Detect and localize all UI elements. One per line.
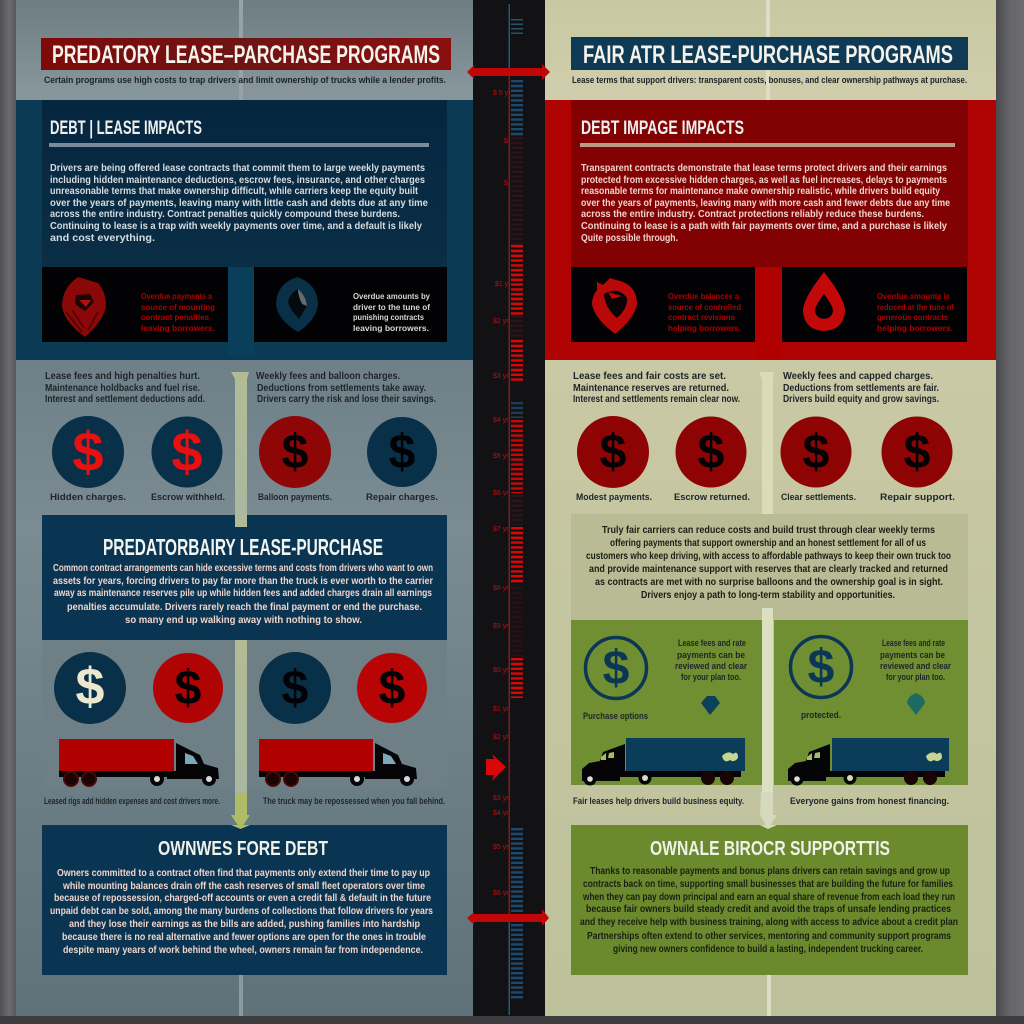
truck captions: fair [573,796,949,806]
timeline labels: $2 yr [493,318,509,325]
heading: debt impacts, fair: DEBT IMPAGE IMPACTS [581,118,744,139]
icon row: dollar coins, predatory [50,416,438,502]
card text: debt burden: source of mounting [141,302,215,312]
fair coin labels: Escrow returned. [674,492,750,502]
text columns: predatory costs: Interest and settlement deductions add. [45,394,205,405]
timeline labels: $4 yr [493,417,509,424]
body text: debt impacts, fair: protected from excessive hidden charges, as well as fuel increases, delays to payments [581,174,947,186]
text columns: fair costs: Drivers build equity and grow savings. [783,394,939,405]
card: debt burden [42,267,228,342]
card: reduced burden [571,267,755,342]
body text: owners for debt [50,867,433,956]
panel: predatory programs (left column) [16,0,473,1016]
subtitle: predatory: Certain programs use high costs to trap drivers and limit ownership of trucks while a lender profits. [44,75,446,85]
green card text right: reviewed and clear [880,661,951,671]
icon: coin 1 [52,416,124,488]
body text: debt impacts, fair: reasonable terms for maintenance make ownership realistic, while drivers build equity [581,185,940,197]
fair coin labels [576,492,955,502]
text columns: predatory costs: Deductions from settlements take away. [257,383,426,394]
timeline labels: $5 yr [493,844,509,851]
panel: fair explanation [571,514,968,620]
coin labels: Balloon payments. [258,492,332,502]
timeline labels: $ [504,180,508,187]
connector bar: upper left [231,372,249,527]
timeline tick bands [511,19,523,1000]
card text: debt burden: leaving borrowers. [141,323,215,333]
text columns: predatory costs: Drivers carry the risk and lose their savings. [257,394,436,405]
timeline labels: $9 yr [493,623,509,630]
green card text left [675,638,747,682]
icon: fair coin 4: $ [904,426,931,479]
icon: fair coin 3: $ [803,426,830,479]
icon: red truck 2 [259,739,417,786]
icon row: dollar coins, fair [576,416,955,502]
icon: coin 4: $ [389,426,416,479]
icon: fair coin 4 [882,416,952,488]
caption: left gem: Purchase options [583,711,648,721]
fair coin labels: Repair support. [880,492,955,502]
central timeline strip [467,0,550,1016]
green panels: fair support [571,608,968,829]
body text: owners for debt: because there is no real alternative and fewer options are open for the ones in trouble [62,931,426,943]
icon: outlined coin right: $ [808,641,835,694]
green card text right: payments can be [880,650,945,660]
body text: debt impacts, fair: Quite possible through. [581,232,678,244]
icon: round gem [907,693,925,715]
body text: debt lease impacts: across the entire industry. Contract penalties quickly compound these burdens. [50,208,400,220]
card text: drop of relief: Overdue amounts is [877,291,950,301]
icon: outlined coin left [586,638,646,698]
icon: coin 6: $ [175,662,202,715]
icon: coin 2 [152,416,222,488]
body text: predatory lease-purchase: penalties accumulate. Drivers rarely reach the final payment or end the purchase. [67,601,422,613]
timeline labels: $3 yr [493,373,509,380]
body text: debt lease impacts: unreasonable terms that make ownership difficult, while carriers keep the equity built [50,185,418,197]
timeline labels: $1 yr [495,281,511,288]
card text: drop of relief: generous contracts [877,312,948,322]
icon: coin 3: $ [282,426,309,479]
arrow: bottom double-headed [467,909,549,926]
truck captions: predatory: Leased rigs add hidden expenses and cost drivers more. [44,796,220,806]
timeline labels: $6 yr [493,890,509,897]
timeline labels: $7 yr [493,526,509,533]
section: debt and lease impacts [16,100,473,360]
arrow: top double-headed [467,64,550,80]
card text: drop of relief: reduced at the tune of [877,302,954,312]
icon: fair coin 2: $ [698,426,725,479]
subtitle: fair: Lease terms that support drivers: transparent costs, bonuses, and clear ownership pathways at purchase. [572,75,967,85]
panel: predatory lease-purchase [42,515,447,640]
icon: coin 6 [153,653,223,723]
text columns: predatory costs: Maintenance holdbacks and fuel rise. [45,383,200,394]
truck captions: predatory: The truck may be repossessed when you fall behind. [263,796,445,806]
icon: red shield pin [62,277,106,337]
body text: debt lease impacts: over the years of payments, leaving many with little cash and debts due at any time [50,197,428,209]
text columns: fair costs: Interest and settlements remain clear now. [573,394,740,405]
timeline labels [493,90,511,897]
icon: red drop [803,272,845,331]
text columns: predatory costs: Lease fees and high penalties hurt. [45,371,200,382]
heading: owners for debt: OWNWES FORE DEBT [158,838,328,860]
timeline labels: $5 yr [493,453,509,460]
card text: lost equity [353,291,430,333]
icon: coin 2: $ [171,420,203,483]
green card text left: for your plan too. [681,672,741,682]
body text: owners for debt: and they lose their earnings as the bills are added, pushing families into hardship [69,918,420,930]
body text: fair explanation: Truly fair carriers can reduce costs and build trust through clear weekly terms [602,524,935,536]
text columns: fair costs [573,371,939,405]
card text: reduced burden [668,291,741,333]
card text: reduced burden: Overdue balances a [668,291,739,301]
card text: drop of relief [877,291,954,333]
card text: lost equity: Overdue amounts by [353,291,430,301]
card: drop of relief [782,267,967,342]
body text: debt lease impacts [50,162,428,244]
timeline labels: $3 yr [493,795,509,802]
text columns: fair costs: Maintenance reserves are returned. [573,383,729,394]
card text: debt burden: contract penalties [141,312,209,322]
title banner: predatory: PREDATORY LEASE–PARCHASE PROGRAMS [52,41,440,69]
caption: right gem: protected. [801,710,841,720]
arrow: middle marker [486,754,506,781]
body text: owners for debt: Owners committed to a contract often find that payments only extend their time to pay up [57,867,430,879]
body text: owner support: giving new owners confidence to build a lasting, independent trucking career. [613,943,923,955]
coin labels: Escrow withheld. [151,492,225,502]
timeline labels: $8 yr [493,585,509,592]
icon: coin 7: $ [282,662,309,715]
card text: reduced burden: contract revisions [668,312,735,322]
text columns: fair costs: Lease fees and fair costs are set. [573,371,726,382]
body text: predatory lease-purchase: Common contract arrangements can hide excessive terms and costs from drivers who want to own [53,562,433,574]
timeline labels: $ [504,138,508,145]
section: debt impacts, fair [545,100,996,360]
body text: predatory lease-purchase [53,562,433,626]
body text: fair explanation: as contracts are met with no surprise balloons and the ownership goal is in sight. [595,576,943,588]
body text: debt impacts, fair: across the entire industry. Contract protections reliably reduce these burdens. [581,208,924,220]
card text: debt burden [141,291,215,333]
text columns: fair costs: Deductions from settlements are fair. [783,383,939,394]
region: coins and trucks, predatory [42,640,447,829]
card text: drop of relief: helping borrowers. [877,323,953,333]
body text: debt lease impacts: and cost everything. [50,232,155,244]
connector bar: upper right [759,372,774,515]
body text: fair explanation [586,524,951,601]
icon: coin 5 [54,652,126,724]
heading: debt lease impacts: DEBT | LEASE IMPACTS [50,118,202,139]
timeline labels: $0 yr [493,667,509,674]
timeline labels: $1 yr [493,706,509,713]
body text: fair explanation: offering payments that support ownership and an honest settlement for all of us [610,537,926,549]
body text: owners for debt: unpaid debt can be sold, among the many burdens of collections that follow drivers for years [50,905,433,917]
body text: predatory lease-purchase: away as maintenance reserves pile up while hidden fees and added charges drain all earnings [54,587,432,599]
heading: owner support: OWNALE BIROCR SUPPORTTIS [650,838,890,860]
body text: debt lease impacts: including hidden maintenance deductions, escrow fees, insurance, and other charges [50,174,425,186]
icon: coin 5: $ [76,658,105,716]
icon: navy pin [276,277,318,332]
body text: debt lease impacts: Drivers are being offered lease contracts that commit them to large weekly payments [50,162,425,174]
truck captions: predatory [44,796,445,806]
timeline labels: $6 yr [493,490,509,497]
card: lost equity [254,267,447,342]
body text: debt impacts, fair [581,162,950,244]
body text: owner support [580,865,958,955]
icon: coin 8: $ [379,662,406,715]
icon: coin 7 [259,652,331,724]
connector arrow: to owner support [760,608,777,829]
heading: predatory lease-purchase: PREDATORBAIRY LEASE-PURCHASE [103,534,383,560]
icon: navy truck 2 [788,738,949,786]
timeline labels: $ 5 yr [493,90,511,97]
card text: lost equity: leaving borrowers. [353,323,429,333]
body text: fair explanation: and provide maintenance support with reserves that are clearly tracked and returned [589,563,948,575]
icon: coin 3 [259,416,331,488]
icon: fair coin 1 [577,416,649,488]
body text: debt lease impacts: Continuing to lease is a trap with weekly payments over time, and a default is likely [50,220,422,232]
coin labels [50,492,438,502]
green card text left: payments can be [677,650,745,660]
coin labels: Hidden charges. [50,492,126,502]
green card text right [880,638,951,682]
connector arrow: to owner debt [231,640,250,829]
icon: coin 8 [357,653,427,723]
truck captions: fair: Everyone gains from honest financing. [790,796,949,806]
body text: owner support: because fair owners build steady credit and avoid the traps of unsafe lending practices [586,903,951,915]
icon: navy gem [701,696,720,715]
body text: owners for debt: while mounting balances drain off the cash reserves of small fleet operators over time [62,880,425,892]
body text: debt impacts, fair: Transparent contracts demonstrate that lease terms protect drivers and their earnings [581,162,947,174]
text columns: fair costs: Weekly fees and capped charges. [783,371,933,382]
icon: fair coin 3 [780,416,852,488]
fair coin labels: Modest payments. [576,492,652,502]
text columns: predatory costs [45,371,436,405]
body text: debt impacts, fair: Continuing to lease is a path with fair payments over time, and a purchase is likely [581,220,947,232]
green card text right: for your plan too. [886,672,945,682]
card text: lost equity: driver to the tune of [353,302,430,312]
green card text left: reviewed and clear [675,661,747,671]
timeline labels: $4 yr [493,810,509,817]
text columns: predatory costs: Weekly fees and balloon charges. [256,371,400,382]
truck captions: fair: Fair leases help drivers build business equity. [573,796,744,806]
body text: owner support: Thanks to reasonable payments and bonus plans drivers can retain savings and grow up [590,865,950,877]
icon: red truck 1 [59,739,219,786]
fair coin labels: Clear settlements. [781,492,856,502]
card text: debt burden: Overdue payments a [141,291,212,301]
card text: reduced burden: source of controlled [668,302,741,312]
timeline labels: $2 yr [493,734,509,741]
icon: outlined coin left: $ [603,642,630,695]
timeline line [508,4,510,1015]
green card text right: Lease fees and rate [882,638,945,648]
green card text left: Lease fees and rate [678,638,746,648]
card text: lost equity: punishing contracts [353,312,424,322]
icon: red pin with bird [592,278,637,334]
icon: fair coin 1: $ [600,426,627,479]
title banner: predatory [41,38,451,70]
icon: outlined coin right [790,636,852,698]
icon: coin 1: $ [72,420,104,483]
body text: predatory lease-purchase: so many end up walking away with nothing to show. [125,614,362,626]
body text: debt impacts, fair: over the years of payments, leaving many with more cash and fewer debts due any time [581,197,950,209]
panel: owners for debt [42,825,447,975]
body text: owner support: Partnerships often extend to other services, mentoring and community support programs [587,930,951,942]
icon: coin 4 [367,417,437,487]
body text: fair explanation: Drivers enjoy a path to long-term stability and opportunities. [641,589,895,601]
icon: navy truck 1 [582,738,745,786]
body text: owners for debt: because of repossession, charged-off accounts or even a credit fall & default in the future [54,892,431,904]
body text: predatory lease-purchase: assets for years, forcing drivers to pay far more than the truck is ever worth to the carrier [53,575,433,587]
panel: fair programs (right column) [545,0,996,1016]
panel: owner support [571,825,968,975]
coin labels: Repair charges. [366,492,438,502]
body text: owners for debt: despite many years of work behind the wheel, owners remain far from independence. [63,944,423,956]
card text: reduced burden: helping borrowers. [668,323,741,333]
icon: fair coin 2 [676,416,746,488]
